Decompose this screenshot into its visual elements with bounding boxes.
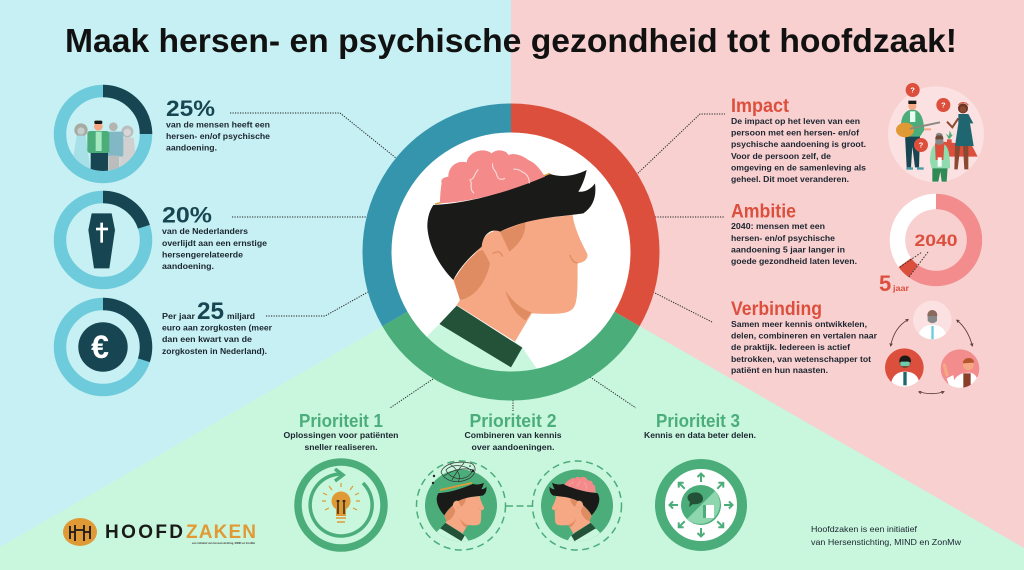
connector lines: [230, 113, 725, 411]
icon: priority 1 light bulb cycle: [298, 462, 384, 548]
title: Maak hersen- en psychische gezondheid tot hoofdzaak!: [65, 22, 957, 59]
ring: blue segment: [377, 118, 511, 319]
stat: 20 percent: [162, 203, 268, 271]
icon: people with questions: ?: [919, 141, 924, 150]
logo: een initiatief van Hersenstichting, MIND en ZonMw: [192, 542, 255, 545]
chart: 2040 donut: jaar: [892, 284, 909, 293]
logo: HOOFD: [105, 522, 183, 543]
panel: impact: [731, 96, 867, 184]
footer note: [811, 525, 961, 547]
panel: impact: psychische aandoening is groot.: [731, 140, 866, 149]
logo: ZAKEN: [186, 522, 256, 543]
icon: euro coin: €: [91, 329, 109, 365]
panel: ambitie: Ambitie: [731, 202, 796, 223]
head with exposed brain: [427, 150, 596, 372]
stat: 20 percent: hersengerelateerde: [162, 250, 244, 260]
panel: verbinding: de praktijk. Iedereen is actief: [731, 343, 850, 352]
stat: 25 percent: [166, 96, 271, 152]
icon: three connected people: [885, 301, 979, 394]
stat: 25 miljard: zorgkosten in Nederland).: [162, 347, 267, 356]
stat: 25 percent: hersen- en/of psychische: [166, 132, 271, 141]
icon: people with questions: [888, 83, 984, 182]
priority 2 text: Prioriteit 2: [470, 411, 556, 431]
background: green section: [0, 252, 1024, 570]
panel: impact: Voor de persoon zelf, de: [731, 152, 832, 161]
logo: [63, 518, 256, 546]
background: pink section: [511, 0, 1024, 548]
panel: ambitie: goede gezondheid laten leven.: [731, 257, 857, 266]
priority 2 text: Combineren van kennis: [464, 431, 562, 440]
stat: 25 percent: van de mensen heeft een: [166, 120, 270, 130]
panel: verbinding: Verbinding: [731, 299, 822, 320]
ring: red segment: [511, 118, 645, 319]
panel: impact: geheel. Dit moet veranderen.: [731, 175, 849, 184]
stat: 25 miljard: Per jaar: [162, 312, 195, 321]
stat: 25 miljard: euro aan zorgkosten (meer: [162, 324, 272, 333]
panel: verbinding: patiënt en hun naasten.: [731, 366, 828, 375]
panel: ambitie: 2040: mensen met een: [731, 222, 825, 231]
panel: impact: De impact op het leven van een: [731, 117, 860, 126]
stat: 20 percent: van de Nederlanders: [162, 227, 249, 236]
donut: 25 percent with people: [60, 91, 146, 177]
priority 1 text: [284, 411, 399, 452]
donut: costs with euro: [60, 304, 146, 390]
left head with tangled thoughts: [416, 461, 506, 556]
stat: 25 percent: aandoening.: [166, 144, 217, 152]
panel: verbinding: Samen meer kennis ontwikkelen,: [731, 320, 867, 329]
stat: 25 miljard: 25: [197, 298, 224, 325]
chart: 2040 donut: 5: [879, 271, 891, 296]
panel: verbinding: delen, combineren en vertalen naar: [731, 332, 877, 341]
priority 3 text: Prioriteit 3: [656, 411, 740, 431]
priority 2 text: [464, 411, 562, 452]
priority 1 text: Oplossingen voor patiënten: [284, 431, 399, 440]
panel: verbinding: betrokken, van wetenschapper tot: [731, 355, 871, 364]
right head with brain: [532, 461, 622, 556]
priority 1 text: Prioriteit 1: [299, 411, 383, 431]
donut: 20 percent with coffin: [60, 197, 146, 283]
dashed connector: [506, 505, 532, 507]
stat: 25 miljard: miljard: [227, 312, 255, 321]
stat: 20 percent: 20%: [162, 203, 212, 228]
icon: people with questions: ?: [941, 101, 946, 110]
chart: 2040 donut: [879, 202, 974, 296]
priority 3 text: [644, 411, 756, 440]
panel: verbinding: [731, 299, 877, 375]
panel: ambitie: [731, 202, 857, 266]
chart: 2040 donut: 2040: [914, 231, 958, 250]
stat: 20 percent: overlijdt aan een ernstige: [162, 239, 268, 248]
footer note: van Hersenstichting, MIND en ZonMw: [811, 538, 961, 547]
stat: 25 percent: 25%: [166, 96, 215, 121]
stat: 25 miljard: dan een kwart van de: [162, 335, 253, 344]
icon: priority 2 two heads: [416, 461, 622, 556]
panel: impact: Impact: [731, 96, 790, 117]
footer note: Hoofdzaken is een initiatief: [811, 525, 918, 534]
white disc: [389, 130, 633, 374]
icon: people with questions: ?: [910, 86, 915, 95]
panel: ambitie: aandoening 5 jaar langer in: [731, 246, 845, 255]
priority 3 text: Kennis en data beter delen.: [644, 431, 756, 440]
icon: coffin: [88, 213, 115, 268]
panel: impact: persoon met een hersen- en/of: [731, 129, 859, 138]
priority 2 text: over aandoeningen.: [472, 443, 554, 452]
icon: group of people: [72, 121, 136, 171]
stat: 25 miljard: [162, 298, 272, 356]
panel: ambitie: hersen- en/of psychische: [731, 234, 836, 243]
icon: priority 3 data sharing: [660, 464, 742, 546]
panel: impact: omgeving en de samenleving als: [731, 164, 867, 173]
priority 1 text: sneller realiseren.: [304, 443, 378, 452]
ring: green segment: [395, 319, 627, 386]
central head illustration with ring: [370, 118, 645, 417]
stat: 20 percent: aandoening.: [162, 262, 214, 271]
